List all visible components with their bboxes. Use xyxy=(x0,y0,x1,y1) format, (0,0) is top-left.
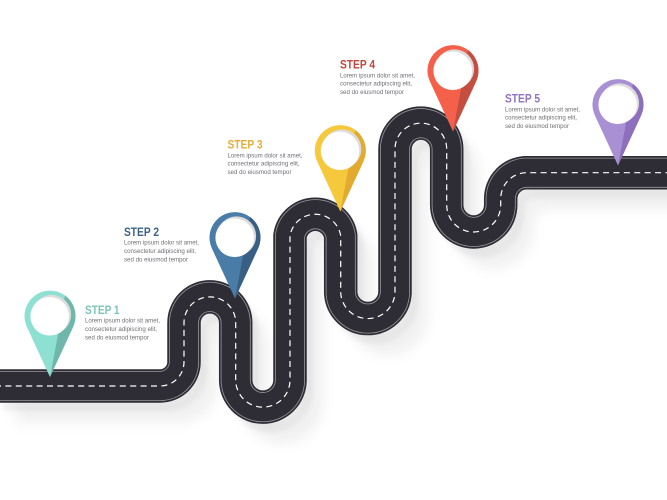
step 1 label: Lorem ipsum dolor sit amet, xyxy=(85,318,160,325)
step 4 label: consectetur adipiscing elit, xyxy=(340,81,412,88)
step 1 label xyxy=(85,303,160,342)
step 5 label: STEP 5 xyxy=(505,92,540,106)
icon: yellow map pin xyxy=(315,125,366,212)
step 2 label xyxy=(124,225,199,264)
step 3 label: sed do eiusmod tempor xyxy=(228,169,292,176)
step 5 label: Lorem ipsum dolor sit amet, xyxy=(505,106,580,113)
step 4 label: STEP 4 xyxy=(340,58,375,72)
icon: red map pin xyxy=(428,45,479,132)
step 2 label: consectetur adipiscing elit, xyxy=(124,248,196,255)
step 5 label xyxy=(505,92,580,130)
step 1 label: STEP 1 xyxy=(85,303,120,317)
step 2 label: STEP 2 xyxy=(124,225,159,239)
step 3 label: STEP 3 xyxy=(228,138,263,152)
step 2 label: sed do eiusmod tempor xyxy=(124,256,188,264)
icon: purple map pin xyxy=(592,79,644,166)
icon: blue map pin xyxy=(210,212,261,298)
step 1 label: sed do eiusmod tempor xyxy=(85,334,149,342)
step 5 label: consectetur adipiscing elit, xyxy=(505,115,577,122)
step 3 label xyxy=(228,138,303,176)
step 4 label: sed do eiusmod tempor xyxy=(340,89,404,96)
step 4 label: Lorem ipsum dolor sit amet, xyxy=(340,72,415,79)
step 1 label: consectetur adipiscing elit, xyxy=(85,326,157,333)
step 4 label xyxy=(340,58,415,96)
step 3 label: Lorem ipsum dolor sit amet, xyxy=(228,152,303,159)
step 3 label: consectetur adipiscing elit, xyxy=(228,161,300,168)
road shadow xyxy=(2,132,667,431)
step 2 label: Lorem ipsum dolor sit amet, xyxy=(124,240,199,247)
step 5 label: sed do eiusmod tempor xyxy=(505,123,569,130)
road centre dashes xyxy=(0,123,667,407)
icon: teal map pin xyxy=(24,291,76,377)
winding road xyxy=(0,123,667,407)
